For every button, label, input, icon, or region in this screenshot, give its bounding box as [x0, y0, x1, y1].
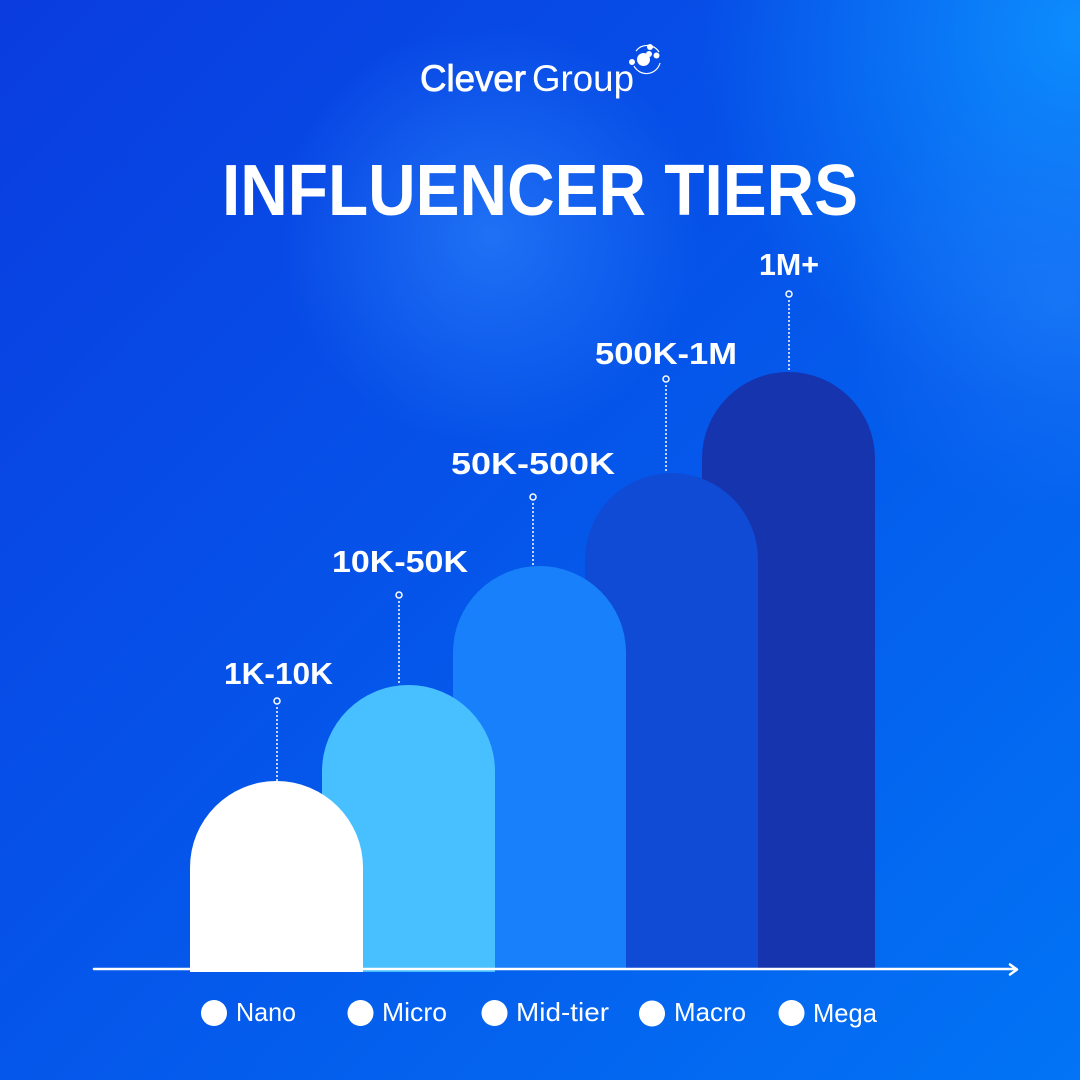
label: 500K-1M: 500K-1M: [595, 336, 737, 371]
logo: Clever Group: [420, 44, 660, 99]
marker: 500K-1M: [663, 376, 669, 473]
bar: Mega: [702, 372, 875, 969]
logo wordmark: Clever: [420, 58, 526, 99]
legend: Micro: Micro: [382, 997, 447, 1027]
marker: 1M+: [786, 291, 792, 372]
label: 10K-50K: 10K-50K: [332, 544, 469, 579]
marker: 10K-50K: [396, 592, 402, 685]
bar: Nano: [190, 781, 363, 972]
legend: Mid-tier: [482, 997, 609, 1027]
legend: Mega: Mega: [813, 998, 878, 1028]
bar: Micro: [322, 685, 495, 972]
title: INFLUENCER TIERS: [222, 151, 858, 231]
logo icon: orbit: [629, 44, 660, 74]
chart: influencer tiers: [94, 247, 1017, 974]
legend: Macro: [639, 997, 746, 1027]
legend: Nano: Nano: [236, 997, 296, 1027]
marker: 1K-10K: [274, 698, 280, 781]
logo wordmark: [420, 58, 634, 99]
bar: Mid-tier: [453, 566, 626, 969]
legend: Nano: [201, 997, 296, 1027]
legend: Macro: Macro: [674, 997, 746, 1027]
legend: [201, 997, 878, 1028]
bar: Macro: [585, 473, 758, 969]
label: 1K-10K: 1K-10K: [224, 656, 334, 691]
legend: Micro: [348, 997, 447, 1027]
legend: Mid-tier: Mid-tier: [516, 997, 609, 1027]
legend: Mega: [778, 998, 878, 1028]
marker: 50K-500K: [530, 494, 536, 566]
label: 1M+: 1M+: [759, 247, 819, 282]
label: 50K-500K: 50K-500K: [451, 446, 616, 481]
logo wordmark: Group: [532, 58, 634, 99]
x axis arrow: [94, 964, 1017, 974]
